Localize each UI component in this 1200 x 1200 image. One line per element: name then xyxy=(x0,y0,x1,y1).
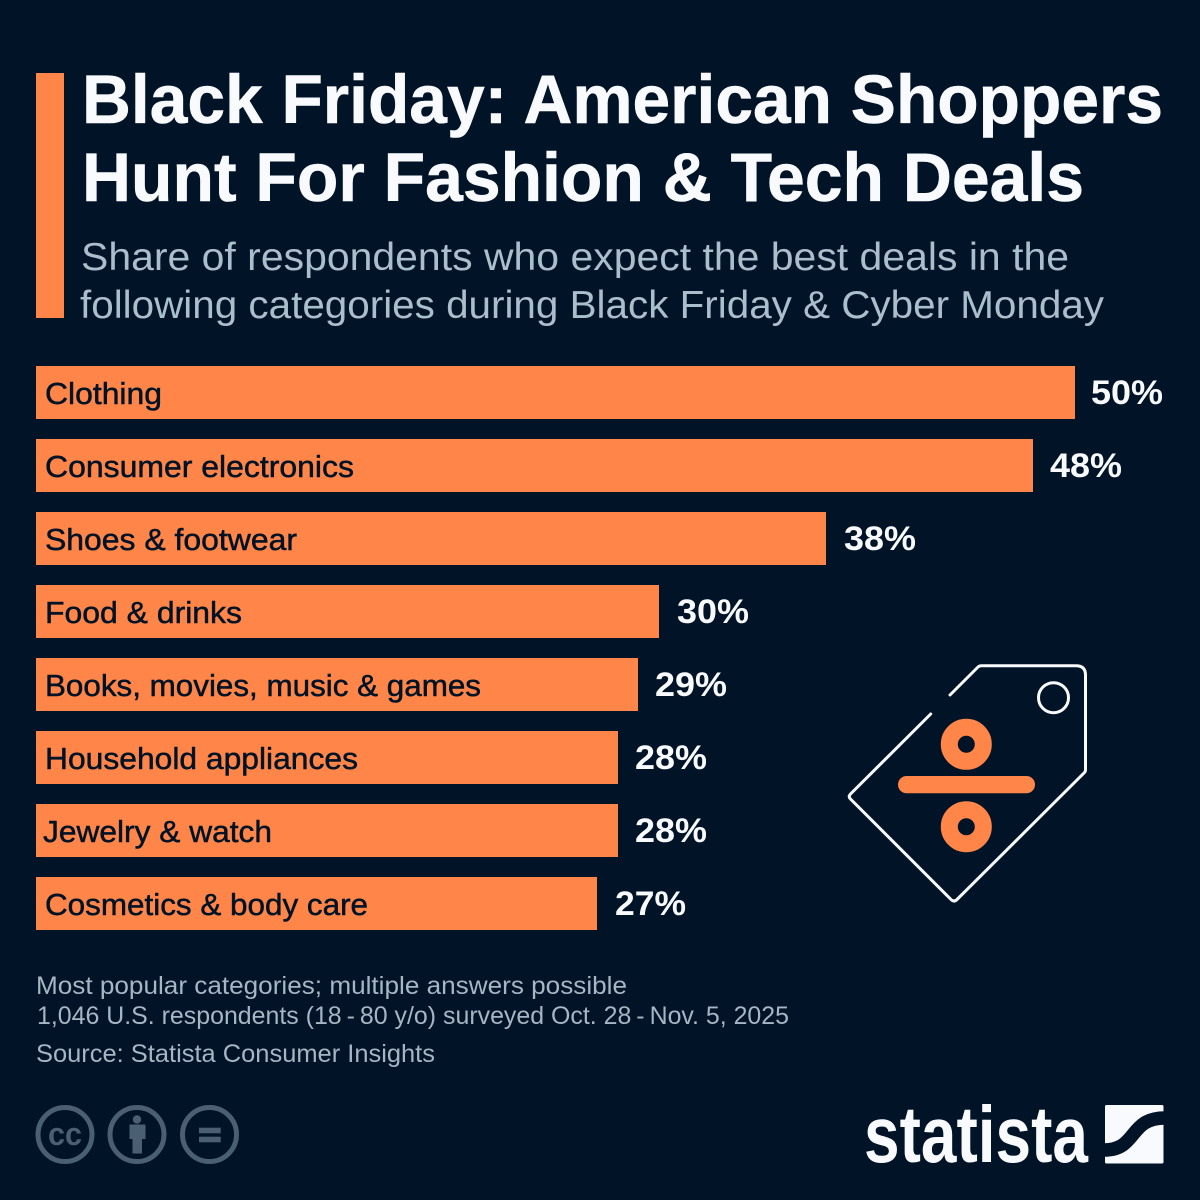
bar: Consumer electronics: 48% xyxy=(1050,447,1122,485)
bar: Cosmetics & body care: Cosmetics & body care xyxy=(45,887,368,922)
bar: Jewelry & watch: 28% xyxy=(635,812,707,850)
icon: cc: cc xyxy=(48,1116,82,1152)
logo: statista: statista xyxy=(864,1090,1088,1179)
icon: cc xyxy=(38,1108,92,1162)
bar: Food & drinks xyxy=(36,585,749,638)
bar: Shoes & footwear xyxy=(36,512,916,565)
icon: price tag with percent-style divide sign xyxy=(849,666,1086,901)
subtitle: following categories during Black Friday & Cyber Monday xyxy=(80,284,1105,327)
bar: Books, movies, music & games: 29% xyxy=(655,666,727,704)
bar: Household appliances xyxy=(36,731,707,784)
title: Black Friday: American Shoppers xyxy=(82,61,1163,138)
bar: Household appliances: Household appliances xyxy=(45,741,358,776)
bar: Cosmetics & body care: 27% xyxy=(615,885,686,923)
footnote: Source: Statista Consumer Insights xyxy=(36,1040,435,1068)
bar: Jewelry & watch: Jewelry & watch xyxy=(43,814,272,849)
bar chart xyxy=(36,366,1163,930)
footnote: Most popular categories; multiple answers possible xyxy=(36,972,627,1000)
icon: statista mark xyxy=(1104,1105,1165,1164)
bar: Books, movies, music & games: Books, movies, music & games xyxy=(45,668,481,703)
subtitle: Share of respondents who expect the best deals in the xyxy=(81,236,1069,279)
bar: Jewelry & watch xyxy=(36,804,707,857)
bar: Household appliances: 28% xyxy=(635,739,707,777)
accent bar xyxy=(36,73,64,318)
bar: Consumer electronics: Consumer electronics xyxy=(45,449,354,484)
bar: Food & drinks: 30% xyxy=(677,593,749,631)
icon: creative commons licence badges xyxy=(38,1108,236,1162)
bar: Shoes & footwear: Shoes & footwear xyxy=(45,522,297,557)
bar: Cosmetics & body care xyxy=(36,877,686,930)
subtitle xyxy=(80,236,1105,327)
footnote xyxy=(36,972,789,1068)
icon: attribution xyxy=(110,1108,164,1162)
bar: Clothing: Clothing xyxy=(45,376,162,411)
title: Hunt For Fashion & Tech Deals xyxy=(82,139,1084,216)
footnote: 1,046 U.S. respondents (18 - 80 y/o) surveyed Oct. 28 - Nov. 5, 2025 xyxy=(37,1002,789,1030)
bar: Clothing xyxy=(36,366,1163,419)
bar: Clothing: 50% xyxy=(1091,374,1163,412)
icon: no derivatives xyxy=(182,1108,236,1162)
bar: Shoes & footwear: 38% xyxy=(844,520,916,558)
bar: Consumer electronics xyxy=(36,439,1122,492)
title xyxy=(82,61,1163,216)
bar: Food & drinks: Food & drinks xyxy=(45,595,242,630)
bar: Books, movies, music & games xyxy=(36,658,727,711)
